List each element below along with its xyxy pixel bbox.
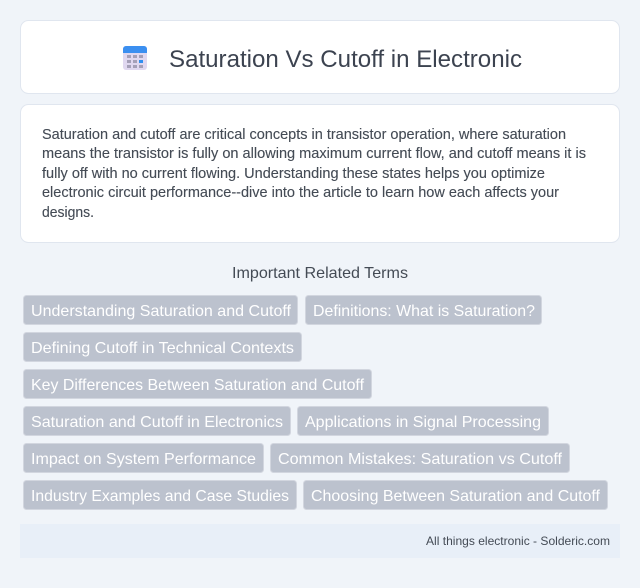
chip bbox=[270, 444, 570, 472]
panel: intro paragraph bbox=[20, 104, 620, 242]
chip bbox=[24, 444, 264, 472]
panel: intro paragraph: means the transistor is fully on allowing maximum current flow, and cutoff means it is bbox=[42, 146, 586, 162]
chips: related terms bbox=[24, 296, 608, 510]
chip bbox=[306, 296, 542, 324]
chip bbox=[304, 480, 608, 510]
chip: Impact on System Performance bbox=[31, 451, 256, 468]
chip: Industry Examples and Case Studies bbox=[31, 488, 289, 505]
chip: Key Differences Between Saturation and Cutoff bbox=[31, 377, 365, 394]
chip: Saturation and Cutoff in Electronics bbox=[31, 414, 283, 431]
header card bbox=[20, 20, 620, 94]
chip bbox=[24, 406, 290, 436]
chip: Common Mistakes: Saturation vs Cutoff bbox=[278, 451, 563, 468]
chip: Understanding Saturation and Cutoff bbox=[31, 303, 292, 320]
chip bbox=[24, 480, 296, 510]
chip bbox=[24, 332, 302, 362]
footer bbox=[20, 524, 620, 558]
chip bbox=[24, 296, 298, 324]
chip: Applications in Signal Processing bbox=[305, 414, 541, 431]
chip bbox=[298, 406, 548, 436]
chip: Choosing Between Saturation and Cutoff bbox=[311, 488, 601, 505]
chip bbox=[24, 370, 372, 398]
chip: Definitions: What is Saturation? bbox=[313, 303, 535, 320]
panel: intro paragraph: Saturation and cutoff are critical concepts in transistor operation, where saturation bbox=[42, 127, 566, 143]
chip: Defining Cutoff in Technical Contexts bbox=[31, 340, 294, 357]
panel: intro paragraph: electronic circuit performance--dive into the article to learn how each affects your bbox=[42, 185, 559, 201]
title: Saturation Vs Cutoff in Electronic bbox=[169, 46, 522, 73]
footer: All things electronic - Solderic.com bbox=[426, 534, 610, 548]
icon: calendar bbox=[123, 46, 147, 70]
heading: related terms: Important Related Terms bbox=[232, 265, 408, 282]
panel: intro paragraph: designs. bbox=[42, 205, 94, 221]
panel: intro paragraph: fully off with no current flowing. Understanding these states helps you optimize bbox=[42, 166, 545, 182]
